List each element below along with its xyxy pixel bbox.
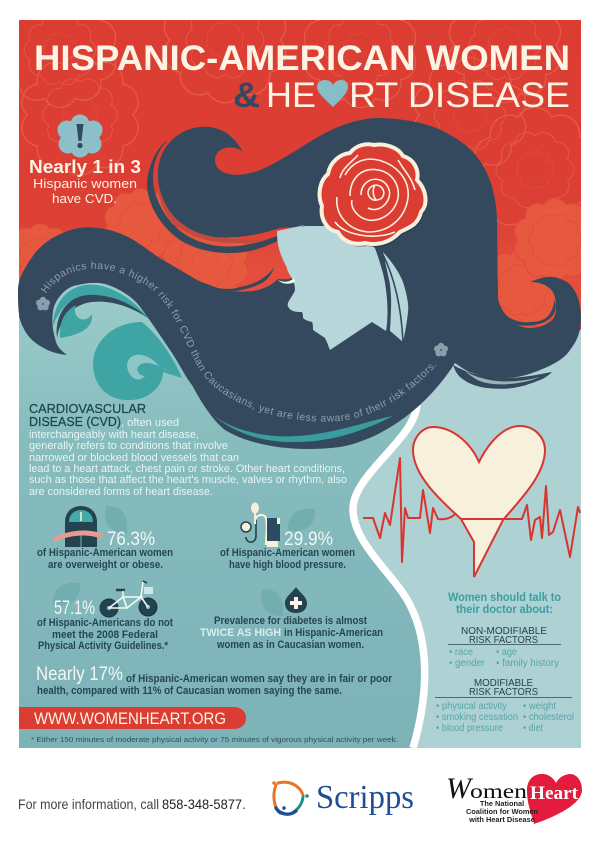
panel: risk factors [435, 592, 574, 734]
panel: lower teal background left [19, 283, 425, 748]
stat: high blood pressure: have high blood pressure. [229, 559, 346, 571]
title [34, 39, 570, 115]
stat: high blood pressure: of Hispanic-American women [220, 547, 355, 559]
callout: nearly 1 in 3: Hispanic women [33, 176, 137, 191]
hair: strand inside right curl [498, 300, 556, 326]
logo: WomenHeart: W [446, 772, 474, 805]
panel: risk factors: • smoking cessation [436, 712, 518, 723]
heart with ECG line [363, 426, 580, 577]
panel: risk factors: • blood pressure [436, 723, 503, 734]
icon: blood pressure cuff [241, 502, 280, 547]
face: forehead sliver [277, 225, 305, 238]
icon: leaf [288, 509, 315, 531]
title: HE [266, 76, 316, 115]
banner: website: WWW.WOMENHEART.ORG [34, 709, 226, 728]
panel: risk factors: NON-MODIFIABLE [461, 626, 547, 637]
contact line: 858-348-5877 [162, 796, 242, 812]
text block: CVD definition: are considered forms of heart disease. [29, 486, 213, 498]
logo: WomenHeart [446, 772, 582, 824]
title: & [233, 76, 260, 115]
panel: risk factors: MODIFIABLE [474, 678, 533, 689]
stat: nearly 17%: Nearly 17% [36, 664, 123, 685]
stat: nearly 17%: health, compared with 11% of Caucasian women saying the same. [37, 685, 342, 697]
stat: physical activity: 57.1% [54, 598, 95, 619]
panel: red rose background [19, 20, 581, 330]
logo: WomenHeart: Heart [530, 783, 579, 804]
logo: WomenHeart: omen [470, 779, 528, 803]
face silhouette [277, 226, 388, 350]
logo: WomenHeart: with Heart Disease [468, 815, 535, 824]
callout: nearly 1 in 3: have CVD. [52, 191, 117, 206]
panel: risk factors: their doctor about: [456, 604, 553, 616]
decorative white swoosh [353, 405, 425, 748]
waves: teal swirls [53, 285, 182, 400]
panel: risk factors: • weight [523, 701, 556, 712]
text block: CVD definition: lead to a heart attack, chest pain or stroke. Other heart conditions, [29, 463, 345, 475]
text block: CVD definition: such as those that affect the heart's muscle, valves or rhythm, also [29, 474, 347, 486]
stat: physical activity: of Hispanic-Americans do not [37, 617, 173, 629]
hair: main silhouette [18, 118, 581, 449]
icon: scale with tape [53, 506, 103, 547]
hair strands beside face [376, 247, 403, 342]
logo: Scripps: Scripps [316, 779, 414, 816]
callout: nearly 1 in 3 [29, 114, 141, 206]
panel: risk factors: • age [496, 647, 517, 658]
panel: risk factors: • family history [496, 658, 559, 669]
panel: risk factors: Women should talk to [448, 592, 561, 604]
teal crescent below hair [213, 415, 393, 442]
panel: risk factors: • race [449, 647, 473, 658]
footnote: * Either 150 minutes of moderate physical activity or 75 minutes of vigorous physical activity per week. [31, 735, 398, 744]
stat: high blood pressure [220, 502, 355, 571]
contact line [18, 796, 246, 812]
stat: diabetes: TWICE AS HIGH [200, 627, 281, 639]
contact line: For more information, call [18, 796, 159, 812]
panel: risk factors: • diet [523, 723, 543, 734]
panel: risk factors: RISK FACTORS [469, 687, 538, 698]
icon: drop with plus [285, 587, 307, 613]
face: eyelash [278, 278, 295, 284]
icon: leaf [53, 583, 80, 605]
hair: back strand behind upper lobe [147, 140, 307, 253]
stat: diabetes [200, 587, 383, 651]
logo: WomenHeart: Coalition for Women [466, 807, 539, 816]
panel: risk factors: • cholesterol [523, 712, 574, 723]
contact line: . [242, 796, 246, 812]
icon: Scripps ring [272, 781, 309, 814]
stat: overweight: are overweight or obese. [48, 559, 163, 571]
text block: CVD definition [29, 402, 347, 498]
flower rose [320, 144, 428, 247]
icon: alert flower [58, 114, 102, 158]
text on hair curve: Hispanics have a higher risk for CVD than Caucasians, yet are less aware of their risk factors. [40, 261, 436, 422]
stat: overweight: 76.3% [107, 529, 155, 550]
icon: bicycle [100, 581, 157, 617]
stat: diabetes: women as in Caucasian women. [216, 639, 364, 651]
stat: physical activity: Physical Activity Guidelines.* [38, 640, 169, 652]
stat: physical activity: meet the 2008 Federal [52, 629, 158, 641]
title: RT DISEASE [349, 76, 570, 115]
hair: lower right crescent highlight [463, 369, 540, 384]
stat: nearly 17% [36, 664, 392, 697]
stat: diabetes: in Hispanic-American [284, 627, 383, 639]
hair: strand under forehead [213, 265, 275, 291]
icon: leaf [261, 589, 283, 616]
logo: WomenHeart: The National [480, 799, 524, 808]
stat: overweight: of Hispanic-American women [37, 547, 173, 559]
face: hair sliver beside neck [383, 252, 408, 342]
text block: CVD definition: , often used [121, 417, 179, 429]
text block: CVD definition: CARDIOVASCULAR [29, 402, 146, 416]
panel: lower light teal background right [19, 330, 581, 748]
stat: overweight [37, 506, 173, 571]
stat: diabetes: Prevalence for diabetes is almost [214, 615, 367, 627]
icon: leaf [105, 506, 127, 533]
callout: nearly 1 in 3: Nearly 1 in 3 [29, 157, 141, 177]
text block: CVD definition: narrowed or blocked blood vessels that can [29, 452, 239, 464]
panel: risk factors: • physical activity [436, 701, 507, 712]
text block: CVD definition: interchangeably with heart disease, [29, 429, 199, 441]
panel: risk factors: RISK FACTORS [469, 635, 538, 646]
panel: risk factors: • gender [449, 658, 486, 669]
stat: high blood pressure: 29.9% [284, 529, 333, 550]
stat: physical activity [37, 581, 173, 652]
logo: Scripps [272, 779, 414, 816]
stat: nearly 17%: of Hispanic-American women say they are in fair or poor [126, 673, 392, 685]
title: HISPANIC-AMERICAN WOMEN [34, 39, 570, 78]
text block: CVD definition: DISEASE (CVD) [29, 415, 121, 429]
text block: CVD definition: generally refers to conditions that involve [29, 440, 228, 452]
